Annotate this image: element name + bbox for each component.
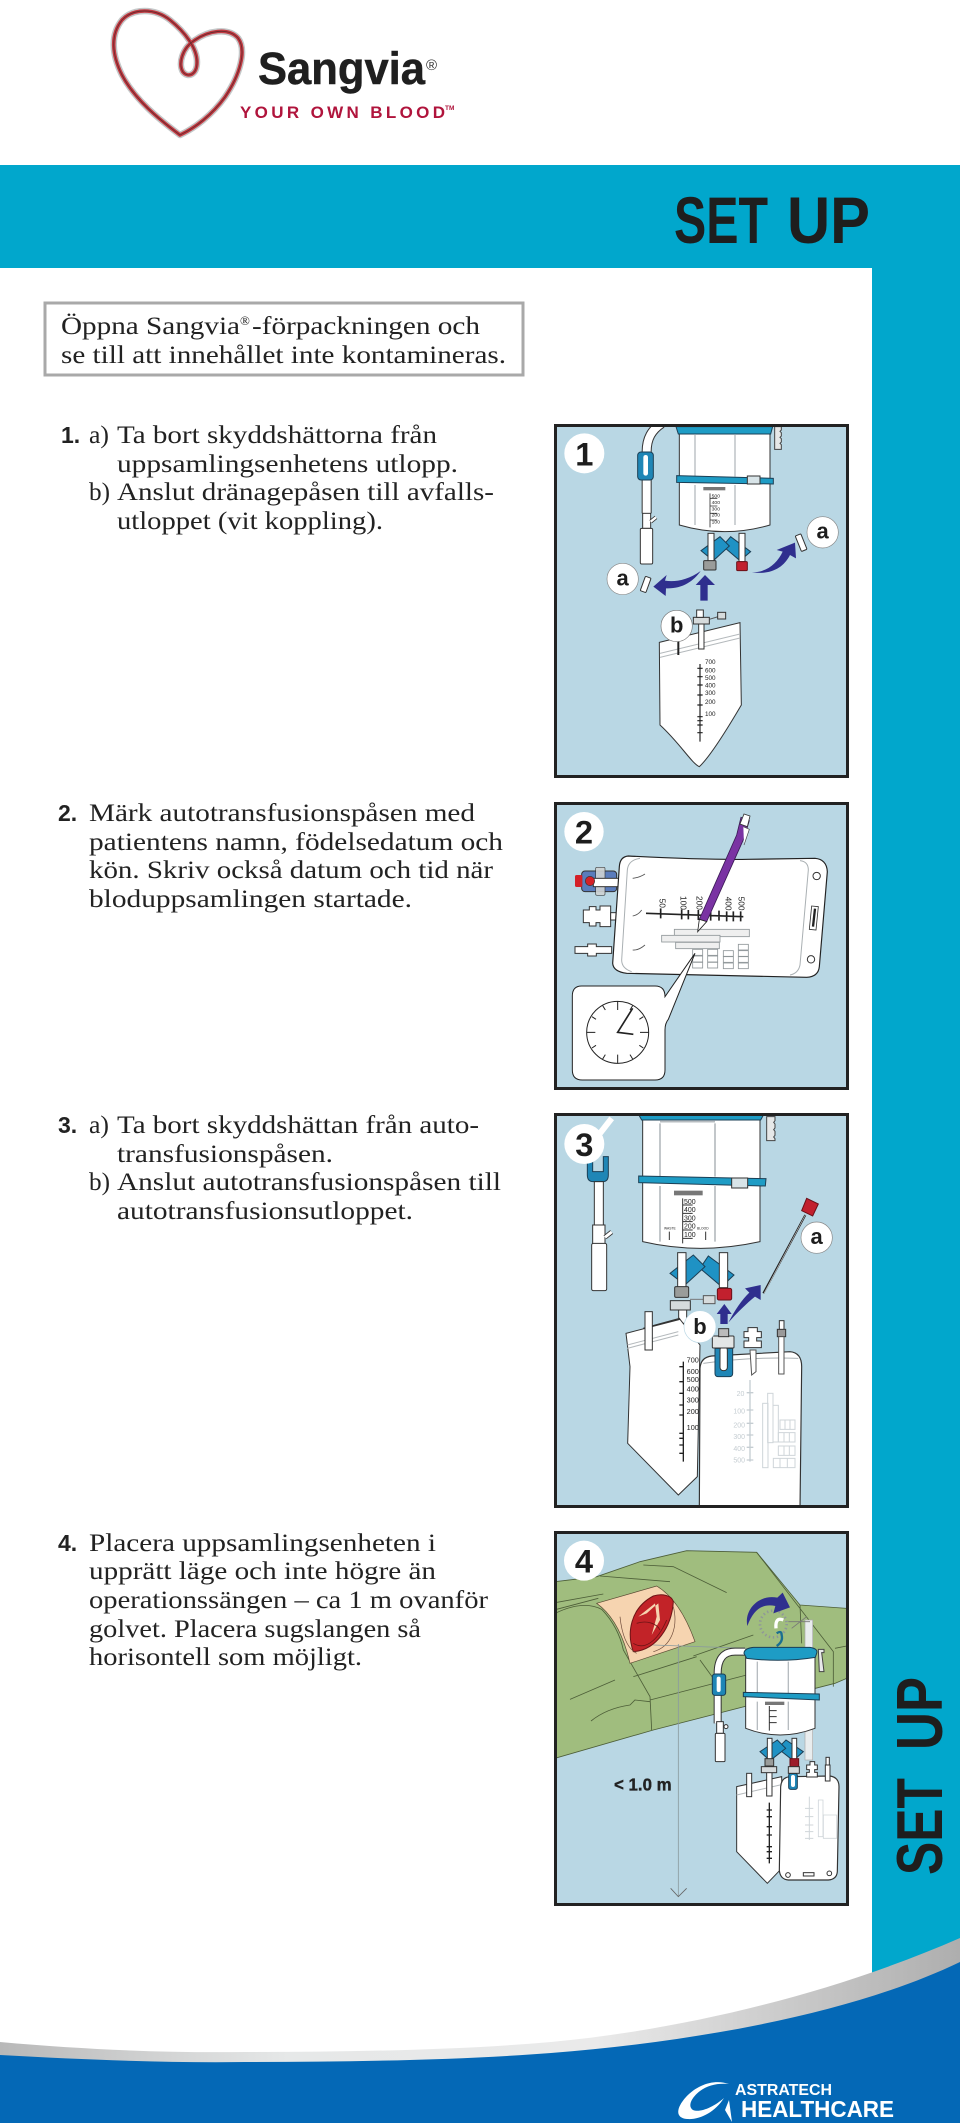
- step 4 text: Placera uppsamlingsenheten i: [89, 1530, 436, 1557]
- drain bag: 500: [687, 1375, 699, 1384]
- distance label: < 1.0 m: [614, 1775, 672, 1795]
- step 4 text: operationssängen – ca 1 m ovanför: [89, 1587, 489, 1614]
- step 2 text: 2.: [58, 800, 77, 826]
- step badge 3: [564, 1124, 604, 1164]
- ports: [574, 867, 618, 956]
- drain bag: 600: [705, 668, 716, 675]
- footer: blue wave: [0, 1938, 960, 2123]
- icon: ribbon heart: [114, 11, 242, 135]
- vertical heading: SET UP: [883, 1677, 956, 1875]
- step 4 text: 4.: [58, 1530, 77, 1556]
- panel 4: place unit below the operating table: [554, 1531, 849, 1906]
- drain bag: 400: [687, 1385, 699, 1394]
- collection unit: 100: [712, 519, 720, 525]
- step badge 4: [564, 1541, 604, 1581]
- collection unit: WASTE: [664, 1226, 676, 1230]
- badge b: [684, 1311, 716, 1343]
- drain bag: 200: [705, 699, 716, 706]
- badge a right: a: [817, 519, 830, 544]
- step 1 text: uppsamlingsenhetens utlopp.: [117, 451, 458, 478]
- autotransfusion bag: 200: [733, 1422, 745, 1429]
- collection unit: 300: [684, 1215, 696, 1222]
- panel 3: connect autotransfusion bag: [554, 1113, 849, 1510]
- step 3 text: autotransfusionsutloppet.: [117, 1198, 413, 1225]
- step 1 text: a): [89, 422, 109, 449]
- drain bag: 300: [687, 1395, 699, 1404]
- panel 1: remove caps, connect drain bag: [554, 423, 849, 778]
- wordmark top: ASTRATECH: [735, 2082, 832, 2099]
- pen: [698, 814, 750, 932]
- bag: 500: [737, 897, 747, 911]
- collection unit: 500: [712, 493, 720, 499]
- collection unit: 500: [684, 1199, 696, 1206]
- badge a left: a: [617, 565, 630, 590]
- collection unit: [743, 1647, 824, 1767]
- step 4 text: [58, 1530, 489, 1671]
- step 3 text: Anslut autotransfusionspåsen till: [117, 1169, 501, 1196]
- cap a left: [640, 576, 651, 593]
- autotransfusion bag: 100: [733, 1408, 745, 1415]
- step 4 text: golvet. Placera sugslangen så: [89, 1616, 421, 1643]
- step 3 text: Ta bort skyddshättan från auto-: [117, 1112, 479, 1139]
- callout box: open package: [45, 303, 523, 375]
- bag: 50: [658, 899, 668, 908]
- trademark: TM: [445, 105, 454, 112]
- step 3 text: transfusionspåsen.: [117, 1141, 333, 1168]
- heading: SET UP: [674, 183, 870, 257]
- drain bag: 100: [705, 711, 716, 718]
- collection unit: 100: [684, 1232, 696, 1239]
- badge a right: [807, 517, 838, 548]
- badge b: b: [670, 613, 683, 638]
- blue area: [0, 1962, 960, 2123]
- step 2 text: kön. Skriv också datum och tid när: [89, 857, 494, 884]
- badge b: b: [693, 1314, 707, 1339]
- badge b: [661, 610, 692, 642]
- step badge 2: [564, 812, 604, 851]
- collection unit: 200: [684, 1224, 696, 1231]
- step 1 text: b): [89, 479, 110, 506]
- badge a left: [607, 563, 638, 595]
- bag: 100: [678, 896, 688, 910]
- autotransfusion bag: 500: [733, 1458, 745, 1465]
- step badge 2: 2: [575, 814, 593, 851]
- icon: swoosh: [678, 2082, 732, 2122]
- drain bag: 500: [705, 675, 716, 682]
- step badge 1: 1: [575, 435, 593, 472]
- right side band: [872, 165, 960, 2025]
- clock callout: [572, 953, 695, 1080]
- badge a: [801, 1222, 832, 1253]
- step 3 text: [58, 1112, 501, 1225]
- drain bag: 300: [705, 690, 716, 697]
- autotransfusion bag: [779, 1757, 839, 1880]
- collection unit: 400: [684, 1207, 696, 1214]
- drain bag: 700: [687, 1356, 699, 1365]
- callout box: open package: -förpackningen och: [252, 313, 481, 340]
- step 4 text: upprätt läge och inte högre än: [89, 1558, 437, 1585]
- header logo: Sangvia: [114, 11, 454, 135]
- step badge 4: 4: [575, 1543, 593, 1580]
- callout box: open package: ®: [240, 313, 250, 328]
- collection unit: [638, 1114, 775, 1323]
- collection unit: [676, 427, 781, 571]
- autotransfusion bag: [699, 1321, 802, 1510]
- wordmark bottom: HEALTHCARE: [741, 2096, 894, 2122]
- step badge 1: [564, 433, 604, 473]
- tagline: YOUR OWN BLOOD: [240, 103, 445, 122]
- callout box: open package: se till att innehållet inte kontamineras.: [61, 342, 506, 369]
- step 1 text: Ta bort skyddshättorna från: [117, 422, 438, 449]
- header band: [0, 165, 960, 268]
- step 1 text: Anslut dränagepåsen till avfalls-: [117, 479, 494, 506]
- step 1 text: 1.: [61, 422, 80, 448]
- cap a right: [795, 534, 807, 551]
- collection unit: 400: [712, 500, 720, 506]
- arrows: [653, 543, 796, 601]
- step 2 text: Märk autotransfusionspåsen med: [89, 800, 476, 827]
- step 1 text: utloppet (vit koppling).: [117, 508, 383, 535]
- suction tube: [712, 1652, 745, 1762]
- autotransfusion bag: 20: [737, 1391, 745, 1398]
- callout box: open package: Öppna Sangvia: [61, 313, 240, 340]
- silver swoosh: [0, 1938, 960, 2123]
- suction tube with clip and handle: [638, 423, 662, 564]
- step 3 text: b): [89, 1169, 110, 1196]
- panel 2: label the autotransfusion bag: [554, 802, 849, 1090]
- drain bag: [626, 1312, 700, 1495]
- step 2 text: bloduppsamlingen startade.: [89, 886, 412, 913]
- autotransfusion bag: 300: [733, 1434, 745, 1441]
- vertical heading: SET UP: UP: [883, 1677, 956, 1750]
- red cap with pin: [763, 1198, 818, 1293]
- step 3 text: a): [89, 1112, 109, 1139]
- collection unit: 300: [712, 507, 720, 513]
- measuring line: [653, 1644, 747, 1897]
- registered mark: ®: [426, 57, 437, 74]
- badge a: a: [811, 1224, 824, 1249]
- suction tube with clip and handle: [587, 1118, 612, 1291]
- step 2 text: [58, 800, 504, 913]
- collection unit: 200: [712, 513, 720, 519]
- drain bag: [737, 1766, 783, 1883]
- drain bag: [659, 610, 741, 767]
- logo: Astra Tech Healthcare: [678, 2082, 894, 2122]
- heading: SET UP: UP: [787, 183, 870, 257]
- arrows: [717, 1285, 761, 1324]
- step badge 3: 3: [575, 1126, 593, 1163]
- curved arrow: [747, 1593, 790, 1626]
- green surgical drape: [555, 1551, 847, 1758]
- bag: [613, 856, 827, 977]
- collection unit: BLOOD: [697, 1226, 709, 1230]
- pole and hook: [760, 1611, 813, 1760]
- drain bag: 400: [705, 682, 716, 689]
- wound area: [597, 1586, 695, 1663]
- bag: 400: [723, 897, 733, 911]
- step 4 text: horisontell som möjligt.: [89, 1644, 362, 1671]
- drain bag: 200: [687, 1407, 699, 1416]
- wordmark: Sangvia: [258, 43, 426, 94]
- drain bag: 100: [687, 1423, 699, 1432]
- step 2 text: patientens namn, födelsedatum och: [89, 829, 504, 856]
- bag: 200: [694, 896, 704, 910]
- heading: SET UP: SET: [674, 183, 768, 257]
- vertical heading: SET UP: SET: [883, 1778, 956, 1875]
- drain bag: 600: [687, 1367, 699, 1376]
- autotransfusion bag: 400: [733, 1446, 745, 1453]
- drain bag: 700: [705, 659, 716, 666]
- step 1 text: [61, 422, 494, 535]
- step 3 text: 3.: [58, 1112, 77, 1138]
